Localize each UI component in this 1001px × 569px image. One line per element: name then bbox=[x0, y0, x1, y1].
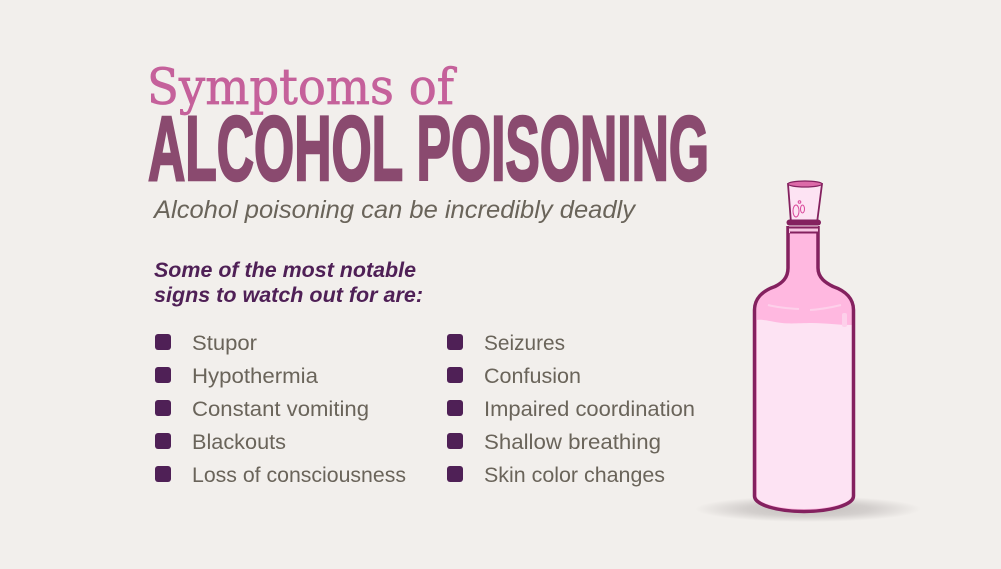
cork top bbox=[788, 181, 822, 187]
item: hypothermia: Hypothermia bbox=[192, 365, 318, 388]
cork bubbles bbox=[793, 201, 804, 217]
item: stupor: Stupor bbox=[192, 332, 257, 355]
subtitle: Alcohol poisoning can be incredibly deadly bbox=[152, 196, 637, 224]
item: constant vomiting: Constant vomiting bbox=[192, 398, 369, 421]
item: blackouts bbox=[155, 431, 286, 454]
liquid bbox=[757, 320, 852, 509]
intro heading: signs to watch out for are: bbox=[154, 284, 423, 307]
bottle shadow bbox=[695, 496, 921, 522]
cork bbox=[788, 184, 822, 223]
bottle body bbox=[754, 226, 854, 512]
symptom list: right column bbox=[447, 332, 695, 487]
item: blackouts: Blackouts bbox=[192, 431, 286, 454]
item: skin color changes: Skin color changes bbox=[484, 464, 665, 487]
symptom list: left column bbox=[155, 332, 406, 487]
item: shallow breathing: Shallow breathing bbox=[484, 431, 661, 454]
intro heading: Some of the most notable bbox=[154, 259, 416, 282]
item: seizures bbox=[447, 332, 565, 355]
icon: bottle illustration bbox=[695, 181, 921, 522]
glass highlights bbox=[768, 305, 841, 310]
intro heading bbox=[154, 259, 423, 307]
item: stupor bbox=[155, 332, 257, 355]
title: symptoms of: Symptoms of bbox=[147, 58, 457, 116]
bottle neck rings bbox=[786, 220, 821, 233]
item: loss of consciousness: Loss of consciousness bbox=[192, 464, 406, 487]
item: impaired coordination: Impaired coordination bbox=[484, 398, 695, 421]
item: seizures: Seizures bbox=[484, 332, 565, 355]
item: confusion: Confusion bbox=[484, 365, 581, 388]
bottle outline bbox=[754, 226, 854, 512]
